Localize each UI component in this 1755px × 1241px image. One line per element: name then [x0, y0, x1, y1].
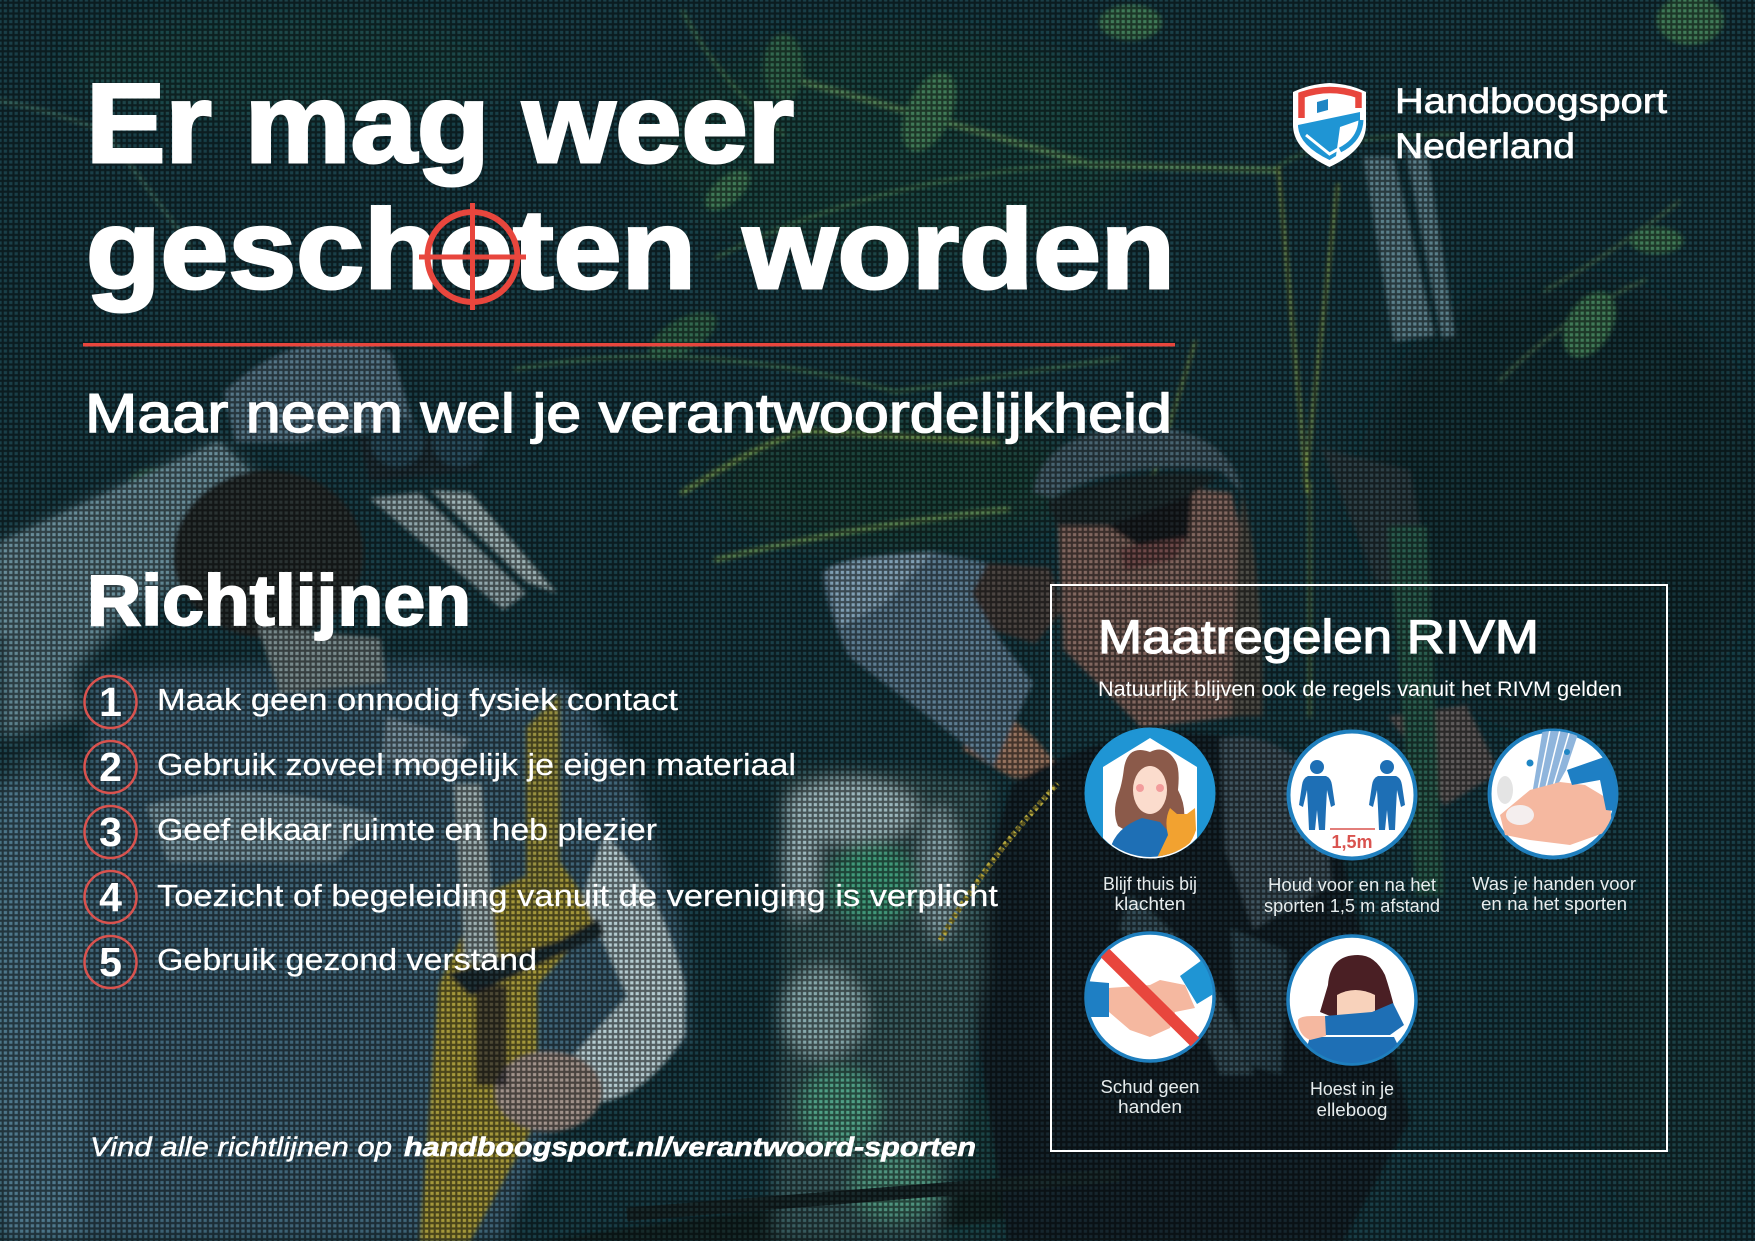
label: stay home: [1103, 874, 1197, 914]
icon: cough in elbow: [1288, 936, 1416, 1070]
label: stay home: Blijf thuis bij: [1103, 874, 1197, 894]
label: distance: Houd voor en na het: [1268, 875, 1436, 895]
logo: Handboogsport Nederland: [1293, 82, 1667, 167]
guidelines list: [84, 676, 998, 988]
item 1: [84, 676, 678, 728]
bow limb top right: [1363, 146, 1455, 341]
right archer: [823, 425, 1500, 1241]
item 3: [84, 806, 657, 858]
heading: Richtlijnen: Richtlijnen: [87, 562, 471, 641]
icon: stay home: [1084, 728, 1216, 862]
item 2: [84, 741, 796, 793]
footer link text: [90, 1132, 976, 1162]
label: cough in elbow: [1310, 1079, 1394, 1120]
label: stay home: klachten: [1114, 894, 1186, 914]
footer link text: Vind alle richtlijnen op: [90, 1132, 392, 1162]
label: wash hands: en na het sporten: [1481, 894, 1627, 914]
label: distance: sporten 1,5 m afstand: [1264, 896, 1440, 916]
icon: keep 1,5 m distance: [1288, 732, 1416, 858]
icon: wash hands: [1490, 728, 1622, 858]
item 5: Gebruik gezond verstand: [157, 942, 537, 977]
icon: shield: [1293, 83, 1366, 167]
label: no handshake: Schud geen: [1100, 1077, 1200, 1097]
title: [86, 61, 1175, 312]
item 1: Maak geen onnodig fysiek contact: [157, 682, 678, 717]
title: worden: [742, 187, 1175, 312]
panel heading: Maatregelen RIVM: [1098, 610, 1539, 663]
red divider: [83, 343, 1175, 346]
logo: Handboogsport Nederland: Nederland: [1395, 127, 1575, 166]
icon: keep 1,5 m distance: 1,5m: [1331, 832, 1373, 852]
item 2: Gebruik zoveel mogelijk je eigen materiaal: [157, 747, 796, 782]
panel: Maatregelen RIVM: [1051, 585, 1667, 1151]
item 5: [84, 936, 537, 988]
label: cough in elbow: elleboog: [1316, 1100, 1388, 1120]
item 3: 3: [99, 809, 122, 855]
logo: Handboogsport Nederland: Handboogsport: [1395, 82, 1667, 121]
subtitle: Maar neem wel je verantwoordelijkheid: [85, 382, 1172, 444]
title: geschoten: [86, 187, 696, 312]
item 5: 5: [99, 939, 122, 985]
label: distance: [1264, 875, 1440, 916]
item 3: Geef elkaar ruimte en heb plezier: [157, 812, 657, 847]
label: no handshake: [1100, 1077, 1200, 1117]
item 1: 1: [99, 679, 122, 725]
footer link text: handboogsport.nl/verantwoord-sporten: [404, 1132, 976, 1162]
label: cough in elbow: Hoest in je: [1310, 1079, 1394, 1099]
label: wash hands: [1472, 874, 1636, 914]
item 4: [84, 871, 998, 923]
item 4: 4: [99, 874, 122, 920]
item 4: Toezicht of begeleiding vanuit de vereniging is verplicht: [157, 878, 998, 913]
icon: target crosshair: [419, 203, 526, 310]
label: no handshake: handen: [1118, 1097, 1182, 1117]
label: wash hands: Was je handen voor: [1472, 874, 1636, 894]
icon: no handshake: [1085, 933, 1220, 1061]
panel intro text: Natuurlijk blijven ook de regels vanuit het RIVM gelden: [1098, 678, 1622, 701]
item 2: 2: [99, 744, 122, 790]
title: Er mag weer: [86, 61, 794, 186]
